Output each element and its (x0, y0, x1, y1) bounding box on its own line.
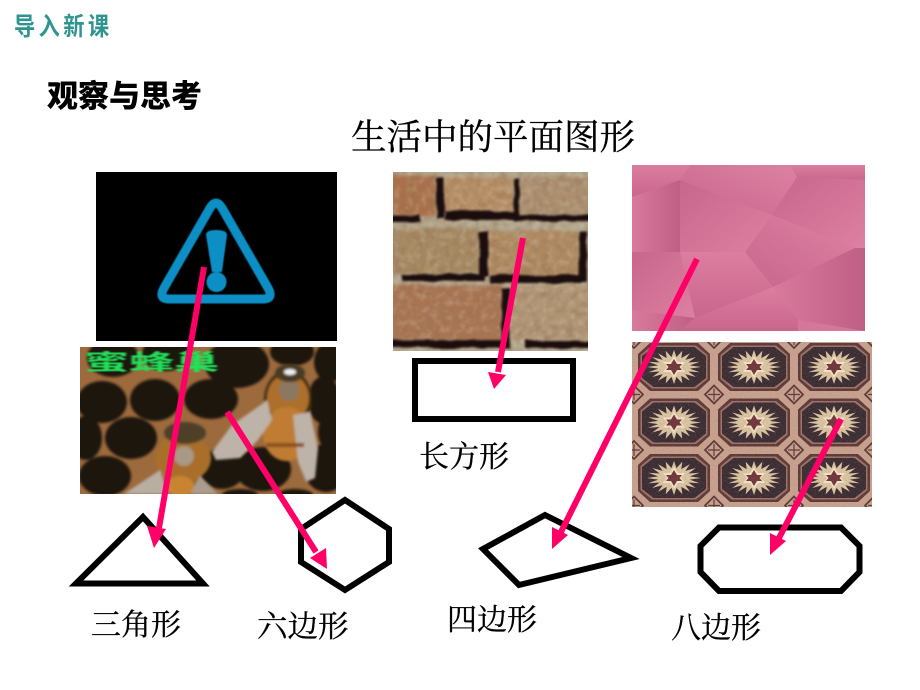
heading: lesson tag: 导入新课 (14, 12, 113, 40)
shape: rectangle (415, 361, 573, 419)
shape: quadrilateral (483, 515, 631, 585)
title: 生活中的平面图形 (351, 117, 635, 157)
arrow: warning sign to triangle (147, 267, 204, 548)
label: rectangle: 长方形 (419, 441, 509, 474)
bee: lower centre (124, 422, 218, 496)
shape: octagon (700, 528, 860, 591)
picture: warning sign (96, 172, 337, 341)
picture: honeycomb with bees (80, 347, 336, 494)
picture: brick wall (390, 172, 591, 351)
label: octagon: 八边形 (671, 612, 761, 645)
picture: octagon carpet (632, 342, 872, 507)
arrow: honeycomb to hexagon (227, 412, 327, 569)
arrow: carpet to octagon (770, 419, 841, 555)
arrow: pink tiles to quadrilateral (552, 259, 697, 549)
arrow: brick to rectangle (488, 238, 523, 389)
label: green caption in photo: 蜜蜂巢 (84, 350, 219, 375)
picture: pink tessellation (632, 165, 865, 331)
label: quadrilateral: 四边形 (447, 604, 537, 637)
shape: hexagon (301, 500, 389, 590)
heading: observe and think: 观察与思考 (47, 79, 202, 114)
label: triangle: 三角形 (91, 609, 181, 642)
label: hexagon: 六边形 (257, 610, 348, 644)
shape: triangle (76, 517, 203, 584)
bee: upper right (212, 364, 318, 482)
